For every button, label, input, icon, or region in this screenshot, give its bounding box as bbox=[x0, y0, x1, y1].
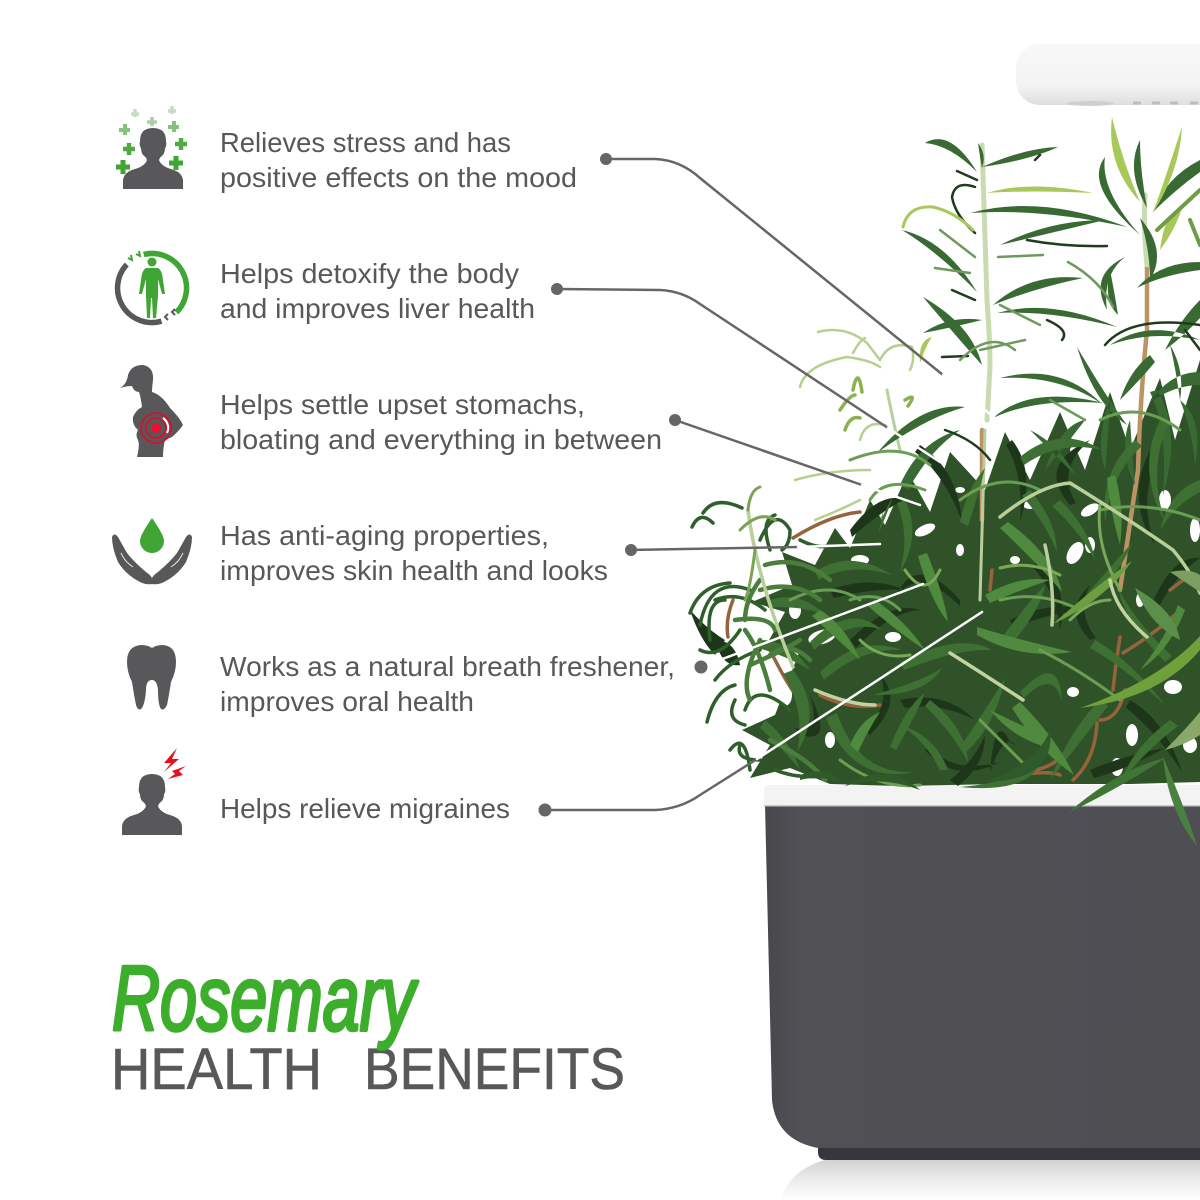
benefit 6: migraines bbox=[122, 748, 510, 835]
benefit 1: stress and mood bbox=[116, 106, 577, 193]
callout line 2 bbox=[551, 283, 940, 462]
callout line 1 bbox=[600, 153, 1003, 425]
title: Rosemary: Rosemary bbox=[112, 948, 419, 1050]
text: Relieves stress and has bbox=[220, 127, 511, 158]
benefit 2: detox and liver bbox=[118, 251, 535, 324]
gaps in foliage bbox=[778, 418, 1200, 776]
text bbox=[220, 127, 577, 193]
callout line 3 bbox=[669, 414, 920, 505]
text: Helps relieve migraines bbox=[220, 793, 510, 824]
left curly tendrils bbox=[690, 503, 830, 777]
text: bloating and everything in between bbox=[220, 424, 662, 455]
text: Helps settle upset stomachs, bbox=[220, 389, 585, 420]
text: Works as a natural breath freshener, bbox=[220, 651, 675, 682]
text: improves skin health and looks bbox=[220, 555, 608, 586]
bright highlight leaves bbox=[1135, 588, 1180, 640]
title: health benefits: BENEFITS bbox=[364, 1037, 625, 1102]
callout line 5 bbox=[694, 584, 923, 674]
text: positive effects on the mood bbox=[220, 162, 577, 193]
upper sprig: main stems bbox=[982, 145, 1147, 420]
benefit 3: stomach bbox=[120, 365, 662, 457]
icon: tooth bbox=[127, 645, 176, 710]
planter pot bbox=[764, 785, 1200, 1200]
icon: hands holding green drop bbox=[112, 518, 192, 584]
title: health benefits bbox=[111, 1037, 625, 1102]
callout line 6 bbox=[538, 612, 982, 816]
benefit 5: oral health bbox=[127, 645, 675, 717]
text: improves oral health bbox=[220, 686, 474, 717]
text: Has anti-aging properties, bbox=[220, 520, 549, 551]
underlayer dark leaves bbox=[690, 440, 1200, 786]
text: and improves liver health bbox=[220, 293, 535, 324]
title: health benefits: HEALTH bbox=[111, 1037, 322, 1102]
text bbox=[220, 651, 675, 717]
pale young sprig bbox=[795, 330, 913, 520]
tan woody stems bbox=[982, 255, 1147, 590]
icon: body in cycle ring bbox=[118, 251, 187, 323]
icon: person with green crosses bbox=[116, 106, 187, 189]
icon: head with red lightning bbox=[122, 748, 186, 835]
leaves overlapping the rim and pot bbox=[1068, 758, 1165, 813]
text bbox=[220, 258, 535, 324]
lime shoots bbox=[920, 117, 1182, 363]
upper sprig: dark leaves bbox=[877, 139, 1200, 495]
lamp head bbox=[1016, 44, 1200, 106]
callout line 4 bbox=[625, 544, 880, 556]
lower foliage: mid green leaves bbox=[758, 420, 1200, 788]
text: Helps detoxify the body bbox=[220, 258, 519, 289]
text bbox=[220, 520, 608, 586]
icon: woman with stomach pain target bbox=[120, 365, 183, 457]
benefit 4: anti-aging bbox=[112, 518, 608, 586]
dense foliage mass bbox=[742, 360, 1200, 786]
rosemary plant bbox=[690, 117, 1200, 846]
text bbox=[220, 389, 662, 455]
